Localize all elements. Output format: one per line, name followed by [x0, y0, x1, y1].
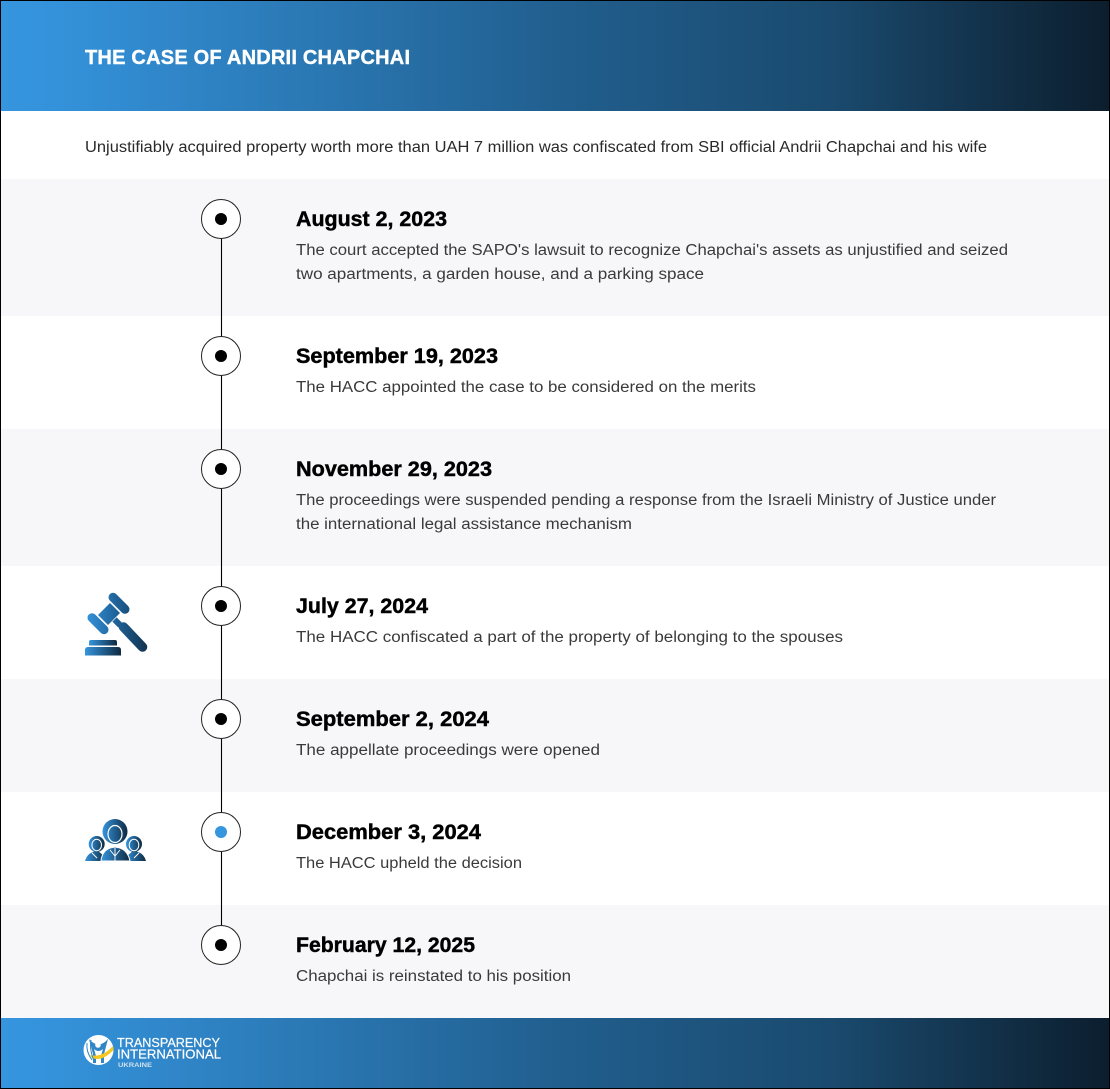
row backgrounds	[1, 179, 1109, 1018]
timeline event: November 29, 2023: The proceedings were suspended pending a response from the Israeli Ministry of Justice under	[296, 492, 996, 509]
timeline event: February 12, 2025: Chapchai is reinstated to his position	[296, 968, 571, 985]
icon: group of judges	[85, 819, 146, 861]
intro text: Unjustifiably acquired property worth more than UAH 7 million was confiscated from SBI official Andrii Chapchai and his wife	[85, 139, 987, 156]
timeline event: August 2, 2023: August 2, 2023	[296, 208, 447, 231]
timeline event: December 3, 2024	[202, 812, 522, 872]
timeline event: November 29, 2023	[202, 450, 996, 533]
timeline event: September 2, 2024: September 2, 2024	[296, 708, 489, 731]
right judge	[125, 850, 146, 861]
timeline event: July 27, 2024: The HACC confiscated a part of the property of belonging to the spouses	[296, 629, 843, 646]
timeline line	[220, 219, 222, 945]
timeline event: August 2, 2023: The court accepted the SAPO's lawsuit to recognize Chapchai's assets as unjustified and seized	[296, 242, 1008, 259]
timeline event: September 19, 2023	[202, 336, 756, 396]
timeline event: December 3, 2024: December 3, 2024	[296, 821, 481, 844]
logo: Transparency International Ukraine: UKRAINE	[118, 1062, 153, 1069]
logo: Transparency International Ukraine	[84, 1035, 221, 1069]
icon: gavel	[85, 597, 142, 656]
timeline event: November 29, 2023: the international legal assistance mechanism	[296, 516, 632, 533]
timeline event: November 29, 2023: November 29, 2023	[296, 458, 492, 481]
timeline event: July 27, 2024: July 27, 2024	[296, 595, 428, 618]
timeline event: September 19, 2023: September 19, 2023	[296, 345, 498, 368]
timeline event: December 3, 2024: The HACC upheld the decision	[296, 855, 522, 872]
timeline event: February 12, 2025	[202, 926, 571, 985]
timeline event: August 2, 2023	[202, 200, 1008, 283]
timeline event: July 27, 2024	[202, 586, 843, 646]
footer banner	[1, 1018, 1109, 1088]
header banner	[1, 1, 1109, 111]
title: THE CASE OF ANDRII CHAPCHAI	[85, 47, 410, 69]
timeline event: September 2, 2024: The appellate proceedings were opened	[296, 742, 600, 759]
timeline event: September 19, 2023: The HACC appointed the case to be considered on the merits	[296, 379, 756, 396]
left judge	[85, 850, 106, 861]
logo: Transparency International Ukraine: TRANSPARENCY	[117, 1035, 220, 1050]
timeline event: February 12, 2025: February 12, 2025	[296, 934, 475, 957]
logo: Transparency International Ukraine: INTERNATIONAL	[117, 1046, 221, 1062]
timeline event: August 2, 2023: two apartments, a garden house, and a parking space	[296, 266, 704, 283]
centre judge	[101, 847, 130, 861]
timeline event: September 2, 2024	[202, 700, 600, 759]
